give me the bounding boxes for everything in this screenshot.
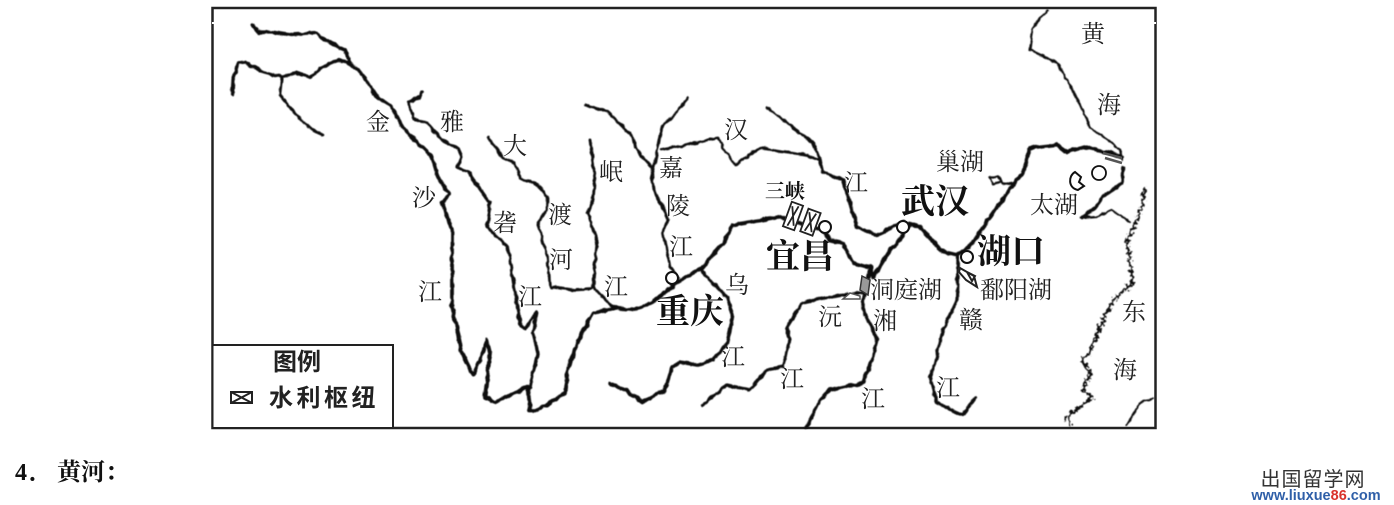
label: dongting lake: 洞庭湖 bbox=[870, 277, 942, 304]
label: gan river: 赣 bbox=[959, 307, 983, 334]
arrow: yuan inflow bbox=[843, 293, 860, 299]
label: dadu river: 河 bbox=[549, 248, 573, 274]
label: wu river: 乌 bbox=[725, 272, 749, 299]
label: dadu river: 渡 bbox=[548, 202, 572, 229]
river: small tributary bbox=[280, 77, 323, 135]
river: yangtze wuhan segment bbox=[820, 160, 903, 235]
label: han river: 汉 bbox=[724, 117, 748, 144]
label: jinsha river: 江 bbox=[418, 279, 442, 306]
river and sea labels bbox=[366, 21, 1146, 413]
label: chongqing: 重庆 bbox=[656, 293, 724, 331]
river: jialing bbox=[585, 105, 678, 277]
rivers bbox=[232, 10, 1153, 427]
legend box bbox=[212, 345, 393, 428]
river: dadu bbox=[488, 137, 592, 290]
label: wu river: 江 bbox=[721, 344, 745, 371]
river: han lower bbox=[662, 138, 820, 165]
river: yangtze middle and lower bbox=[672, 145, 1122, 285]
marker: hukou bbox=[961, 251, 973, 263]
label: yuan river: 沅 bbox=[818, 304, 842, 331]
label: yuan river: 江 bbox=[780, 366, 804, 393]
river: min bbox=[588, 140, 618, 308]
label: jialing river: 江 bbox=[669, 234, 693, 261]
icon: water conservancy hub bbox=[231, 392, 252, 403]
label: hukou: 湖口 bbox=[977, 233, 1045, 271]
label: yalong river: 雅 bbox=[440, 109, 464, 136]
label: yalong river: 砻 bbox=[493, 210, 517, 237]
river: jinsha upper branch bbox=[252, 25, 350, 62]
marker: yichang bbox=[819, 221, 831, 233]
marker: chongqing bbox=[666, 272, 678, 284]
lake: taihu bbox=[1070, 172, 1084, 190]
label: yellow sea: 海 bbox=[1097, 92, 1121, 119]
marker: shanghai bbox=[1092, 166, 1106, 180]
legend title: 图例 bbox=[273, 349, 321, 376]
river: yalong bbox=[409, 92, 538, 387]
river: jialing east branch bbox=[653, 97, 688, 170]
lake: chaohu bbox=[990, 176, 1012, 184]
label: wuhan: 武汉 bbox=[901, 183, 969, 221]
section heading: 4 bbox=[15, 460, 27, 486]
label: yalong river: 江 bbox=[518, 284, 542, 311]
label: han river: 江 bbox=[844, 170, 868, 197]
label: poyang lake: 鄱阳湖 bbox=[980, 277, 1052, 304]
map frame bbox=[212, 8, 1156, 428]
river: yuan bbox=[703, 293, 863, 405]
label: east sea: 海 bbox=[1113, 357, 1137, 384]
lake: poyang bbox=[959, 268, 977, 287]
watermark site name: 出国留学网 bbox=[1260, 468, 1366, 491]
section heading: ： bbox=[105, 460, 129, 486]
river: han upper bbox=[768, 108, 820, 160]
river: xiang bbox=[807, 270, 877, 427]
label: taihu: 太湖 bbox=[1030, 192, 1078, 219]
label: xiang river: 江 bbox=[861, 386, 885, 413]
label: jialing river: 嘉 bbox=[659, 155, 683, 182]
watermark url: www.liuxue86.com bbox=[1250, 488, 1381, 504]
coast: east sea islands bbox=[1067, 188, 1145, 425]
dam block two bbox=[800, 209, 821, 236]
river: jinsha western branch bbox=[232, 60, 348, 95]
label: east sea: 东 bbox=[1122, 299, 1146, 326]
label: jinsha river: 沙 bbox=[412, 185, 437, 212]
label: gan river: 江 bbox=[936, 375, 960, 402]
marker: wuhan bbox=[897, 221, 909, 233]
label: jinsha river: 金 bbox=[366, 109, 390, 136]
coast: south bay bbox=[1082, 210, 1130, 222]
lake: dongting bbox=[860, 276, 870, 295]
label: xiang river: 湘 bbox=[873, 308, 897, 335]
dam: three gorges bbox=[783, 202, 821, 236]
watermark bbox=[1250, 468, 1381, 504]
label: yellow sea: 黄 bbox=[1081, 21, 1106, 48]
label: jialing river: 陵 bbox=[666, 193, 690, 220]
legend bbox=[212, 345, 393, 428]
legend item text: 水利枢纽 bbox=[269, 385, 379, 412]
label: three gorges: 三峡 bbox=[765, 180, 805, 203]
label: dadu river: 大 bbox=[503, 133, 527, 160]
dam block one bbox=[783, 202, 803, 230]
label: min river: 岷 bbox=[599, 160, 623, 186]
river: wu bbox=[610, 272, 733, 402]
coast: yellow sea bbox=[1030, 10, 1122, 160]
white ticks on frame bbox=[212, 22, 1156, 24]
coast: hangzhou bay bbox=[1082, 167, 1123, 218]
section heading: 黄河 bbox=[57, 459, 105, 486]
label: min river: 江 bbox=[604, 274, 628, 301]
section heading: ． bbox=[29, 460, 53, 486]
label: chaohu: 巢湖 bbox=[936, 149, 984, 176]
coast: southeast corner bbox=[1127, 398, 1153, 425]
river: gan bbox=[930, 257, 975, 415]
river: jinsha main stem bbox=[348, 62, 672, 410]
icon: estuary islands bbox=[1103, 153, 1122, 163]
label: yichang: 宜昌 bbox=[766, 238, 834, 276]
